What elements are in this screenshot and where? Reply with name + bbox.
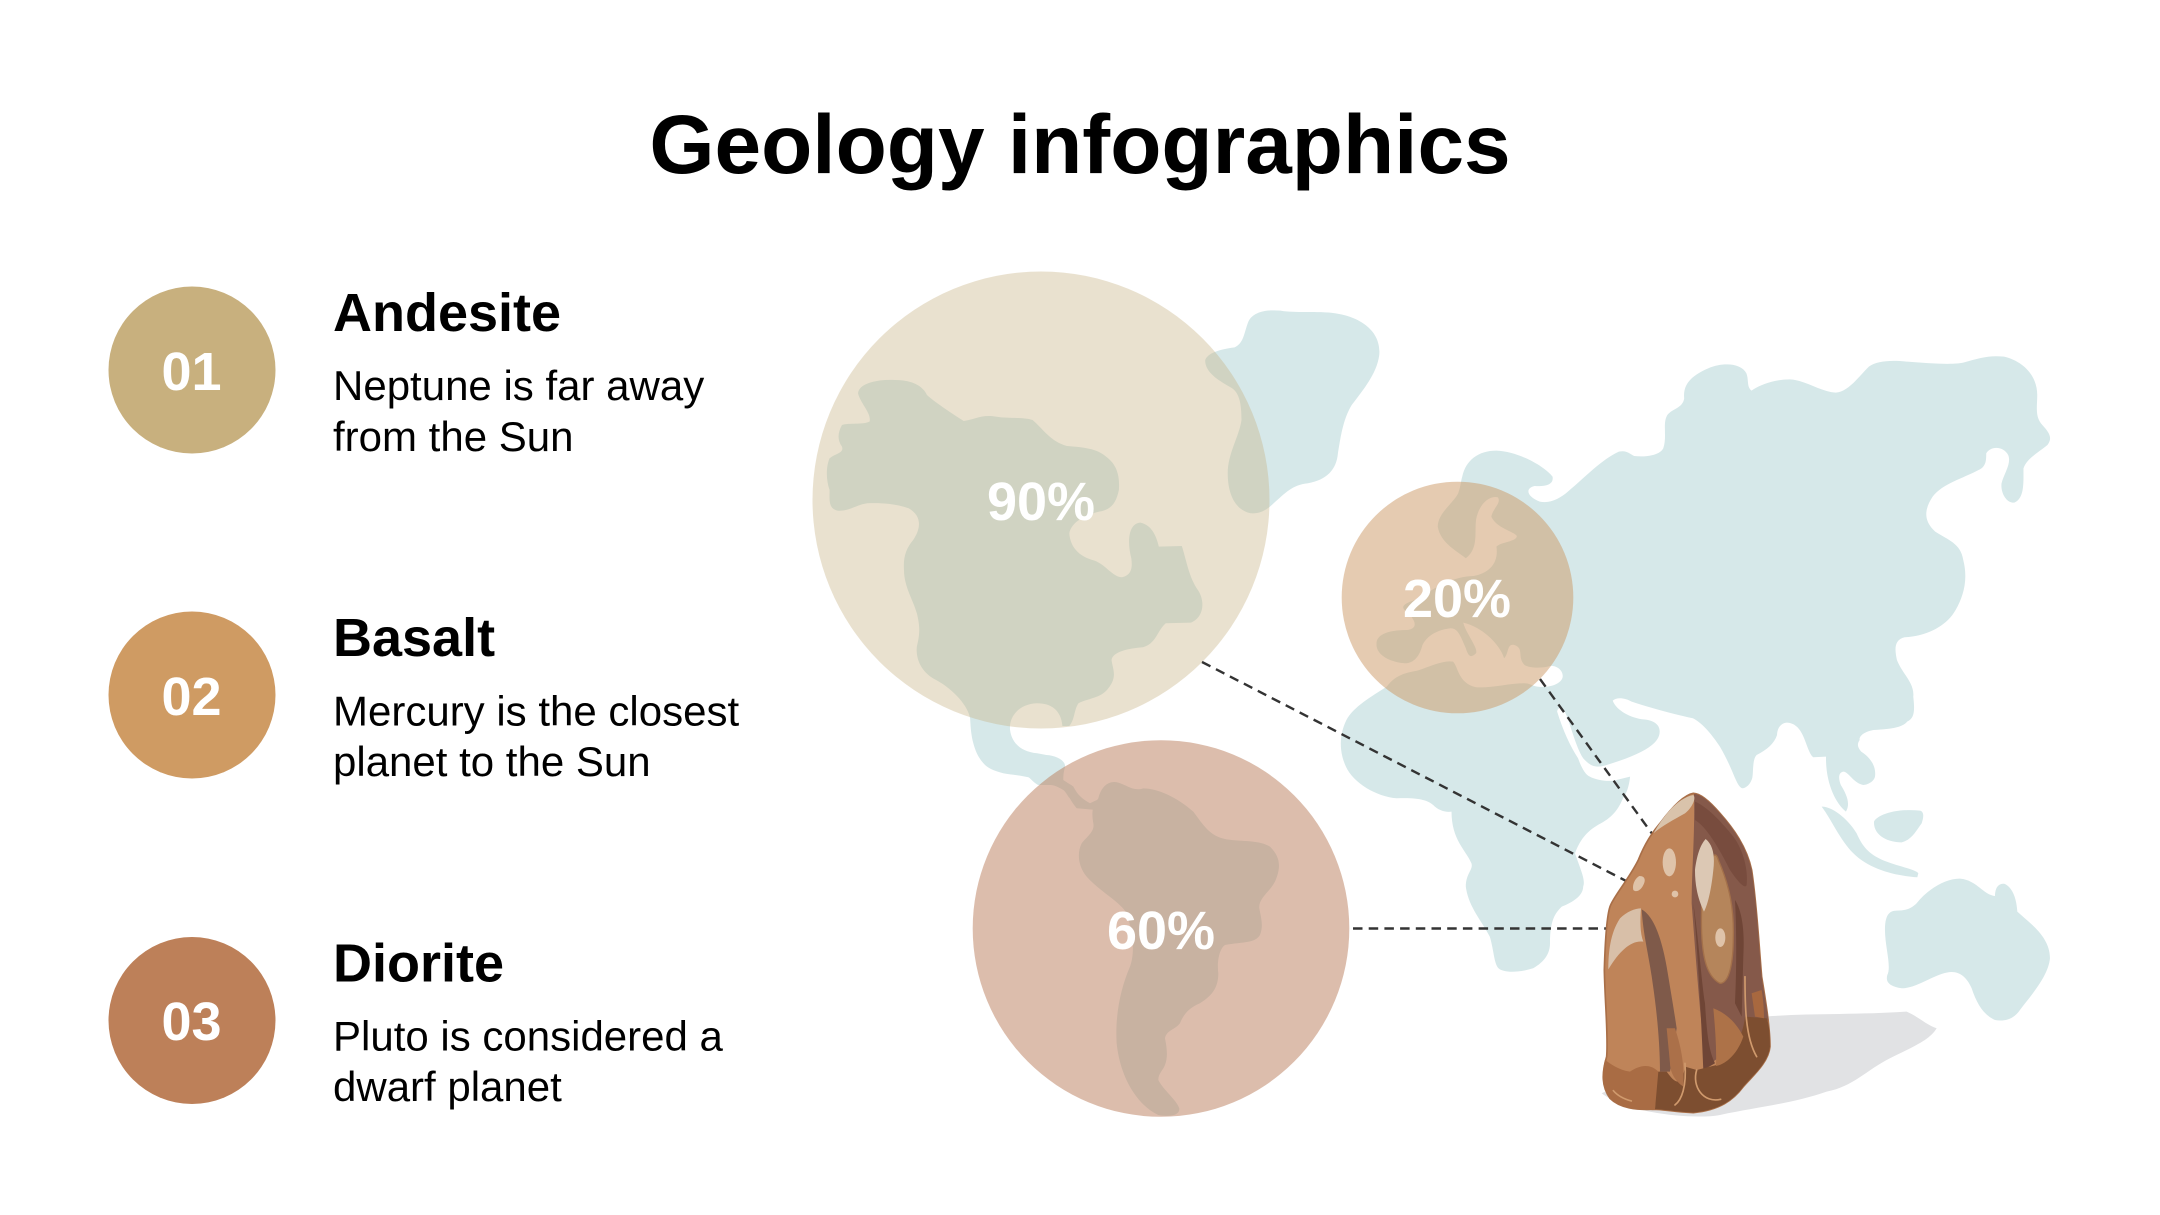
edge lines xyxy=(1613,977,1757,1105)
South America xyxy=(1079,782,1279,1116)
Australia xyxy=(1885,879,2050,1021)
lower middle facet xyxy=(1713,1008,1743,1066)
Borneo xyxy=(1874,810,1923,842)
right lower facet xyxy=(1752,990,1764,1018)
list item: Basalt xyxy=(108,608,739,785)
rock shadow xyxy=(1602,1012,1937,1117)
description: Basalt: planet to the Sun xyxy=(333,738,651,785)
Indonesia xyxy=(1822,807,1918,877)
Greenland xyxy=(1205,310,1379,513)
heading: Basalt: Basalt xyxy=(333,608,495,668)
rock body xyxy=(1603,793,1770,1113)
cream highlight xyxy=(1695,839,1714,912)
data circle: 90%: 90% xyxy=(987,472,1095,532)
data circle: 20%: 20% xyxy=(1403,569,1511,629)
connector: 20% to rock xyxy=(1540,679,1653,835)
Eurasia and Africa xyxy=(1341,356,2050,972)
data circle: 90% xyxy=(812,272,1270,728)
number badge 01: 01 xyxy=(161,342,222,402)
description: Andesite: from the Sun xyxy=(333,413,573,460)
bottom dark band xyxy=(1655,1017,1770,1113)
right facet xyxy=(1692,794,1768,1067)
North and Central America xyxy=(827,380,1202,810)
description: Diorite: Pluto is considered a xyxy=(333,1012,724,1060)
connector: 60% to rock xyxy=(1353,927,1608,930)
world map xyxy=(827,310,2050,1116)
data circle: 60%: 60% xyxy=(1107,901,1215,961)
number badge 03 xyxy=(108,937,276,1104)
connector: 90% to rock xyxy=(1202,662,1630,883)
top highlight xyxy=(1653,795,1694,833)
oval facet xyxy=(1701,855,1733,983)
heading: Andesite: Andesite xyxy=(333,283,561,343)
number badge 01 xyxy=(108,286,276,454)
number badge 02: 02 xyxy=(161,667,222,727)
title: Geology infographics xyxy=(649,97,1511,191)
number badge 03: 03 xyxy=(161,992,222,1052)
rock illustration xyxy=(1603,793,1770,1113)
left dark stripe xyxy=(1642,909,1677,1072)
list item: Diorite xyxy=(108,934,724,1110)
left highlight xyxy=(1608,908,1643,969)
lower left facet xyxy=(1667,1028,1684,1087)
dark upper facet xyxy=(1695,802,1747,886)
description: Andesite: Neptune is far away xyxy=(333,362,704,409)
heading: Diorite: Diorite xyxy=(333,934,504,994)
description: Basalt: Mercury is the closest xyxy=(333,688,739,734)
speckles xyxy=(1633,848,1725,947)
number badge 02 xyxy=(108,612,276,778)
description: Diorite: dwarf planet xyxy=(333,1063,562,1110)
data circle: 20% xyxy=(1342,482,1573,713)
list item: Andesite xyxy=(108,283,704,460)
bottom left facet xyxy=(1603,1060,1658,1109)
dark stripes xyxy=(1693,903,1715,1070)
data circle: 60% xyxy=(973,740,1349,1117)
